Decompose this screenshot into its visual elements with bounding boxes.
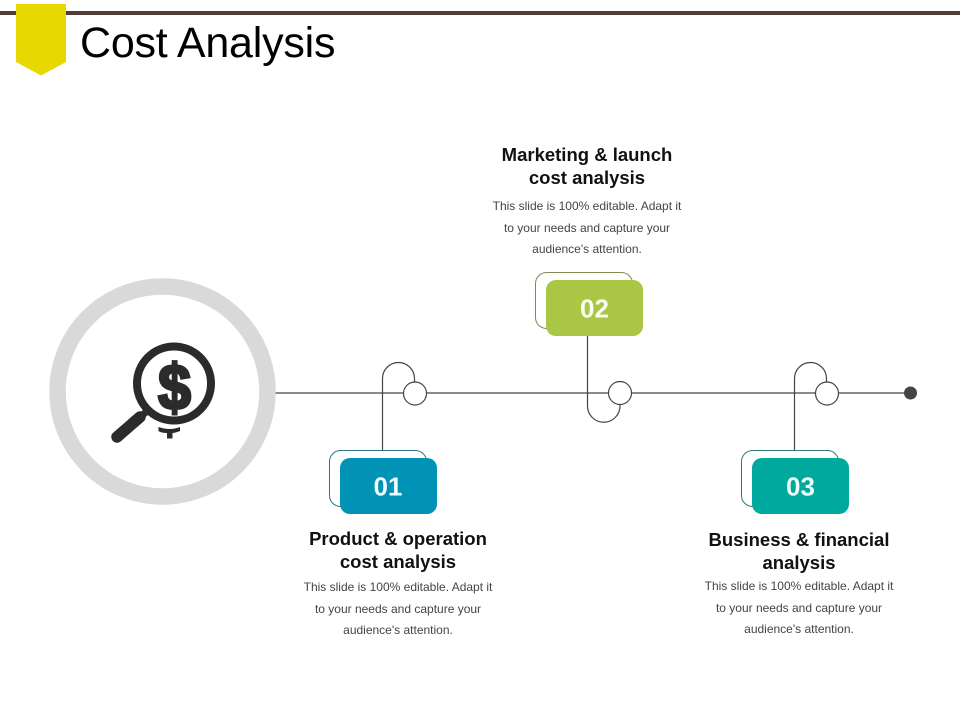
card 01 [330, 450, 437, 514]
card 02 [536, 272, 643, 336]
heading: marketing [502, 144, 672, 188]
connector 03 [794, 362, 838, 450]
card 02: 02 [580, 294, 609, 324]
text: business description [704, 579, 894, 636]
heading: marketing: cost analysis [529, 167, 645, 188]
card 03 [742, 450, 849, 514]
connector 01 [382, 362, 426, 450]
icon: magnifier with dollar: $ [158, 352, 191, 424]
card 03: 03 [786, 472, 815, 502]
heading: marketing: Marketing & launch [502, 144, 672, 165]
heading: product: Product & operation [309, 528, 487, 549]
title: Cost Analysis [80, 19, 335, 67]
text: marketing description: audience's attention. [532, 242, 642, 256]
card 01: 01 [374, 472, 402, 502]
text: marketing description: This slide is 100% editable. Adapt it [493, 199, 681, 213]
top bar [0, 11, 960, 15]
heading: product [309, 528, 487, 572]
text: product description: This slide is 100% editable. Adapt it [304, 580, 492, 594]
text: business description: to your needs and capture your [716, 600, 882, 614]
heading: business: Business & financial [709, 529, 889, 550]
text: business description: audience's attention. [744, 622, 854, 636]
text: marketing description [492, 199, 682, 256]
heading: business: analysis [762, 552, 836, 573]
heading: business [709, 529, 889, 573]
text: product description: audience's attention. [343, 623, 453, 637]
main timeline line [275, 392, 905, 394]
ring [58, 286, 268, 496]
icon: magnifier with dollar [117, 346, 211, 438]
icon: yellow ribbon [16, 4, 66, 76]
text: marketing description: to your needs and capture your [504, 220, 670, 234]
text: product description [304, 580, 492, 637]
text: business description: This slide is 100% editable. Adapt it [705, 579, 893, 593]
heading: product: cost analysis [340, 551, 456, 572]
connector 02 [588, 336, 632, 422]
text: product description: to your needs and capture your [315, 602, 481, 616]
end dot [904, 386, 917, 400]
